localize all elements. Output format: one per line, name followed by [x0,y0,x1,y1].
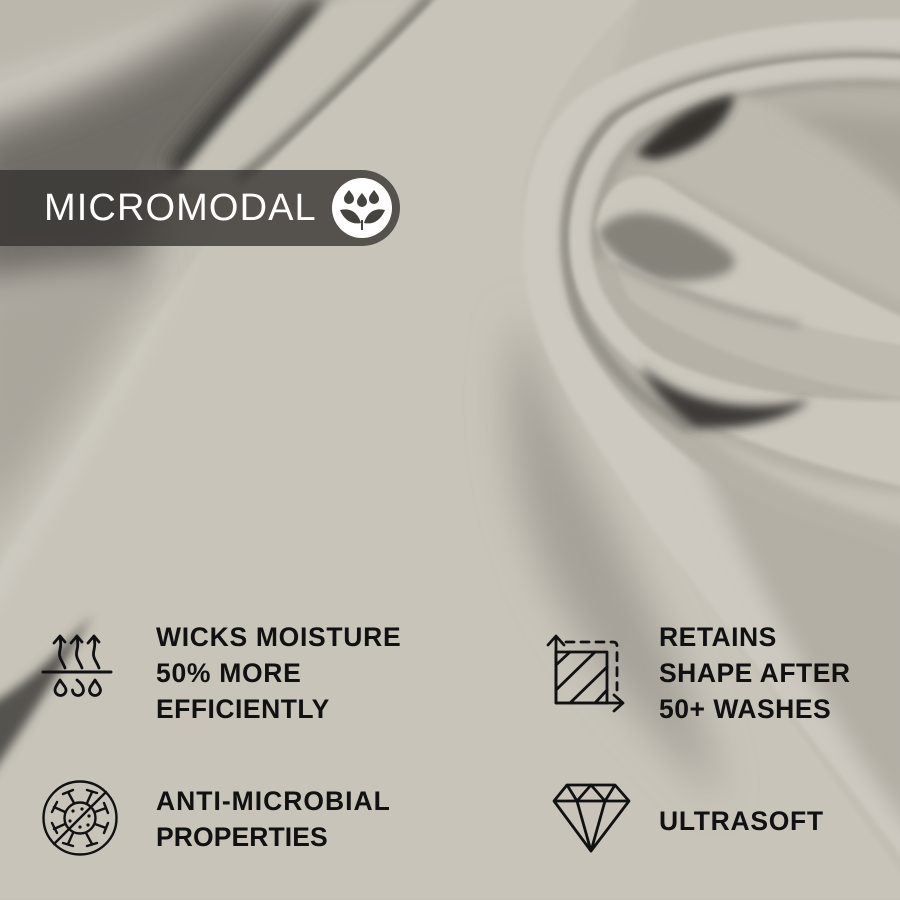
light second rim [580,69,900,395]
rim of the swirl [522,19,900,880]
dark inner edge [566,56,900,430]
icon: diamond [552,784,630,852]
text: wicks moisture [156,622,401,724]
pocket [640,95,900,310]
lower fold [630,340,900,490]
label banner: micromodal [0,170,400,246]
text: anti-microbial properties: ANTI-MICROBIAL [156,786,391,816]
folded lip [596,176,900,350]
text: wicks moisture: 50% MORE [156,658,302,688]
text: wicks moisture: WICKS MOISTURE [156,622,401,652]
text: retains shape [659,622,851,724]
banner text: MICROMODAL [44,187,317,229]
inner swirl base [561,54,900,560]
left side folds [0,0,340,130]
text: retains shape: 50+ WASHES [659,694,831,724]
text: anti-microbial properties: PROPERTIES [156,822,328,852]
text: anti-microbial properties [156,786,391,852]
text: retains shape: SHAPE AFTER [659,658,851,688]
text: ultrasoft: ULTRASOFT [659,806,824,836]
top right [610,0,900,90]
icon: anti-microbial virus crossed out [42,780,118,856]
text: wicks moisture: EFFICIENTLY [156,694,330,724]
text: retains shape: RETAINS [659,622,777,652]
icon: water drops and leaves [332,178,392,238]
icon: retains shape square with arrows [546,634,624,712]
icon: moisture wicking [42,634,112,697]
shaded outer slope at lower right [690,440,900,840]
centre shadow [510,310,720,800]
